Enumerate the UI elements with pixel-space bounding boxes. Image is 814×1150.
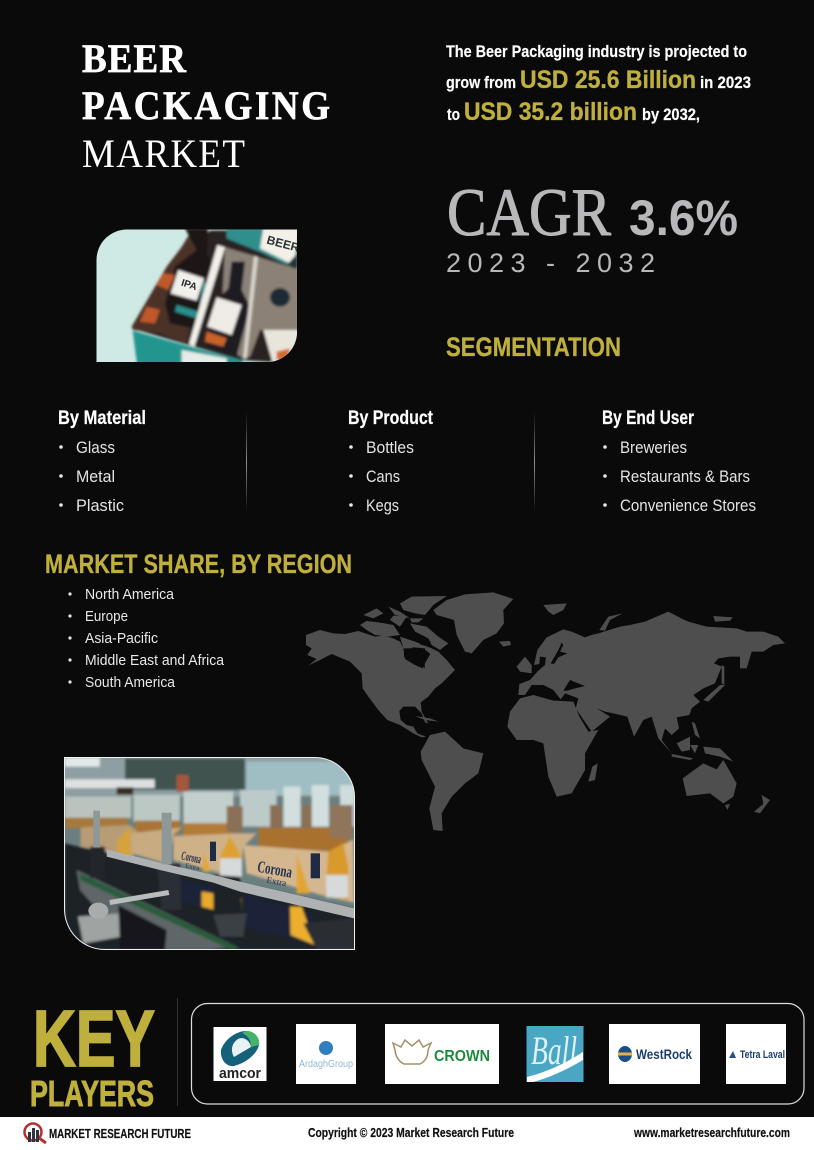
- segment: by product: [348, 408, 434, 515]
- copyright: Copyright © 2023 Market Research Future: [308, 1125, 514, 1140]
- CAGR figure: CAGR: [447, 174, 612, 250]
- eurasia, africa and oceania: [507, 603, 785, 813]
- world map: [306, 592, 785, 831]
- intro text block: to: [447, 105, 460, 124]
- americas and greenland: [306, 592, 532, 831]
- title: [82, 38, 330, 176]
- key players heading: KEY: [33, 994, 155, 1083]
- logo: ardagh group: [296, 1024, 356, 1084]
- heading: market share by region: MARKET SHARE, BY REGION: [45, 549, 352, 579]
- segment: by material: Glass: [76, 438, 115, 457]
- photo: beer gift box: [93, 227, 301, 367]
- segment: by material: Metal: [76, 467, 115, 486]
- region list: South America: [85, 674, 176, 691]
- photo border: [64, 758, 354, 950]
- logo: amcor: [214, 1027, 266, 1082]
- intro text block: USD 25.6 Billion: [520, 66, 696, 94]
- footer logo: [24, 1124, 191, 1143]
- segment: by product: By Product: [348, 408, 434, 429]
- footer bar: [0, 1117, 814, 1150]
- logo: amcor: amcor: [219, 1065, 261, 1082]
- segment: by end user: Convenience Stores: [620, 496, 756, 515]
- key players heading: [30, 994, 155, 1114]
- segment: by product: Cans: [366, 467, 400, 486]
- intro text block: grow from: [446, 73, 516, 92]
- title: PACKAGING: [82, 85, 330, 128]
- segment: by end user: By End User: [602, 408, 694, 429]
- photo: beer gift box: IPA: [180, 278, 198, 293]
- logo: ardagh group: ArdaghGroup: [299, 1059, 353, 1070]
- title: MARKET: [82, 133, 245, 176]
- segment: by material: Plastic: [76, 496, 124, 515]
- CAGR figure: [446, 174, 738, 278]
- photo: beer gift box: BEER: [265, 233, 301, 255]
- region list: North America: [85, 586, 175, 603]
- photo: bottling line: Extra: [185, 862, 200, 872]
- logo: tetra laval: [726, 1024, 786, 1084]
- photo: bottling line: Corona: [256, 857, 294, 882]
- intro text block: The Beer Packaging industry is projected to: [446, 42, 747, 61]
- segment: by material: [58, 408, 146, 515]
- segment: by end user: [602, 408, 756, 515]
- region list: Middle East and Africa: [85, 652, 225, 669]
- photo: bottling line: Extra: [265, 876, 288, 889]
- logo: tetra laval: Tetra Laval: [740, 1049, 785, 1061]
- heading: segmentation: SEGMENTATION: [446, 332, 621, 362]
- logo: westrock: [609, 1024, 700, 1084]
- title: BEER: [82, 38, 187, 81]
- intro text block: in 2023: [700, 73, 751, 92]
- logo: ball: [526, 1026, 584, 1082]
- CAGR figure: 3.6%: [629, 190, 738, 246]
- segment: by material: By Material: [58, 408, 146, 429]
- segment: by product: Bottles: [366, 438, 414, 457]
- key players heading: PLAYERS: [30, 1073, 154, 1114]
- segment: by end user: Restaurants & Bars: [620, 467, 750, 486]
- region list: [68, 586, 225, 691]
- intro text block: USD 35.2 billion: [464, 98, 637, 126]
- key players logo panel: [192, 1004, 804, 1104]
- logo: crown: [385, 1024, 499, 1084]
- footer logo: MARKET RESEARCH FUTURE: [49, 1126, 191, 1141]
- segment: by product: Kegs: [366, 496, 399, 515]
- photo: bottling line: [63, 757, 357, 950]
- segment: by end user: Breweries: [620, 438, 687, 457]
- logo: westrock: WestRock: [636, 1046, 692, 1062]
- logo: crown: CROWN: [434, 1048, 490, 1065]
- photo: bottling line: Corona: [180, 849, 203, 866]
- region list: Europe: [85, 608, 128, 625]
- region list: Asia-Pacific: [85, 630, 158, 647]
- intro text block: [446, 42, 751, 126]
- intro text block: by 2032,: [642, 105, 700, 124]
- CAGR figure: 2023 - 2032: [446, 248, 655, 278]
- logo: ball: Ball: [531, 1028, 577, 1073]
